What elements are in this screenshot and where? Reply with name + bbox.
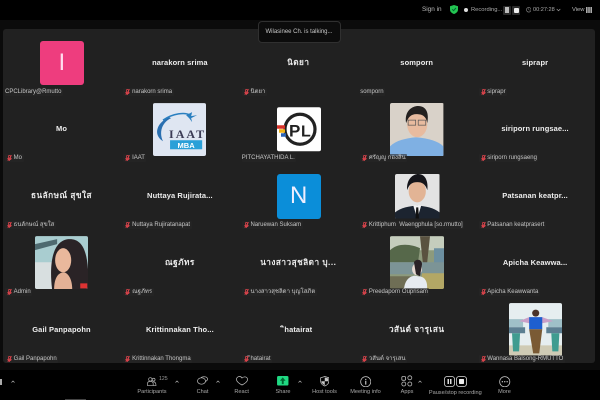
display name: narakorn srima: [152, 58, 208, 67]
participant tile: Krittiphum Waengphula: [362, 174, 463, 228]
icon: pause recording: [444, 376, 455, 386]
name label: [479, 288, 540, 296]
host tools label: Host tools: [312, 389, 337, 395]
display name: Gail Panpapohn: [32, 324, 91, 334]
avatar: blue initial: N: [290, 182, 307, 209]
name label: Nuttaya Rujiratanapat: [132, 222, 190, 228]
name label: ณฐภัทร: [132, 289, 152, 295]
toolbar button: chat: [195, 374, 222, 386]
name label: Apicha Keawwanta: [487, 289, 538, 295]
logo: IAAT MBA: IAAT: [169, 127, 204, 141]
name label: [123, 154, 146, 162]
display name: ณฐภัทร: [165, 258, 195, 267]
icon: timer chevron: [556, 8, 560, 12]
name label: [5, 354, 58, 362]
icon: react heart: [236, 376, 248, 386]
icon: stop recording: [456, 376, 467, 386]
icon: host tools shield: [320, 376, 329, 386]
display name: Krittinnakan Tho...: [146, 324, 214, 334]
name label: [479, 154, 538, 162]
logo: IAAT MBA: [153, 103, 206, 156]
name label: ศรัญญู กองสิน: [369, 155, 406, 161]
react label: React: [234, 389, 249, 395]
name label: [360, 154, 407, 162]
display name: siriporn rungsae...: [501, 124, 569, 133]
share label: Share: [276, 389, 290, 395]
name label: [5, 154, 24, 162]
participant tile: Naruewan Suksam: [244, 174, 321, 228]
name label: ธนลักษณ์ สุขใส: [14, 222, 54, 228]
photo: person in blue shirt among displays: [509, 303, 562, 356]
participant tile: Apicha Keawwanta: [481, 258, 567, 295]
name label: Krittinnakan Thongma: [132, 356, 191, 362]
name label: [123, 88, 174, 96]
display name: นิตยา: [287, 58, 309, 67]
avatar: pink initial: [40, 41, 84, 85]
icon: apps chevron: [418, 380, 422, 383]
participants label: Participants: [137, 389, 167, 395]
toolbar button: participants: [147, 376, 179, 386]
display name: siprapr: [522, 58, 548, 67]
name label: [360, 221, 464, 229]
name label: [479, 354, 565, 362]
icon: pause button: [503, 6, 511, 14]
speaker notification: [258, 21, 340, 43]
recording label: Recording...: [471, 7, 502, 13]
speaker notification: Wilasinee Ch. is talking...: [265, 29, 333, 35]
icon: share chevron: [298, 380, 302, 383]
icon: participants chevron: [174, 380, 178, 383]
participant tile: Gail Panpapohn: [7, 324, 91, 362]
name label: Gail Panpapohn: [14, 356, 57, 362]
sign in link: Sign in: [422, 6, 442, 13]
photo: man in suit: [395, 174, 440, 218]
logo: IAAT MBA: MBA: [178, 140, 196, 149]
participant tile: PITCHAYATHIDA L.: [242, 107, 321, 161]
name label: Admin: [14, 289, 31, 295]
icon: share arrow: [277, 376, 288, 386]
participant tile: somporn: [360, 58, 433, 95]
photo: man in blue shirt: [390, 103, 444, 156]
display name: วสันต์ จารุเสน: [389, 324, 444, 334]
name label: siprapr: [487, 89, 506, 95]
display name: Nuttaya Rujirata...: [147, 191, 213, 200]
top bar: [0, 0, 600, 20]
participant tile: Chatairat: [244, 324, 312, 362]
avatar: pink initial: I: [59, 49, 65, 76]
logo: PL: L: [301, 124, 311, 141]
meeting timer: 00:27:28: [533, 7, 555, 13]
meeting info label: Meeting info: [350, 389, 381, 395]
name label: นิตยา: [250, 89, 265, 95]
participant tile: photo man in blue shirt: [362, 103, 444, 161]
icon: audio chevron: [11, 380, 15, 383]
bottom toolbar: [0, 370, 600, 400]
name label: Mo: [14, 155, 22, 161]
avatar: blue initial: [277, 174, 321, 219]
icon: stop button: [512, 6, 520, 14]
name label: somporn: [360, 89, 384, 95]
name label: [242, 288, 317, 296]
participant tile: Preedaporn Ouprisam: [362, 236, 444, 295]
name label: [479, 221, 546, 229]
participant tile: ธนลักษณ์ สุขใส: [7, 190, 92, 228]
participant tile: ณฐภัทร: [125, 258, 195, 295]
name label: [479, 88, 507, 96]
name label: CPCLibrary@Rmutto: [5, 89, 61, 95]
icon: apps: [401, 375, 413, 387]
name label: Naruewan Suksam: [250, 222, 301, 228]
name label: Patsanan keatprasert: [487, 222, 544, 228]
name label: [242, 354, 272, 362]
display name: Mo: [56, 124, 67, 133]
audio button, cropped at left edge: [0, 379, 15, 385]
icon: partial microphone: [0, 378, 2, 384]
display name: ธนลักษณ์ สุขใส: [31, 191, 92, 200]
view button: View: [572, 7, 584, 13]
participant tile: วสันต์ จารุเสน: [362, 324, 444, 362]
name label: IAAT: [132, 155, 145, 161]
toolbar button: pause/stop recording: [444, 376, 467, 386]
icon: view grid: [586, 7, 592, 13]
apps label: Apps: [401, 389, 413, 395]
participant tile: narakorn srima: [125, 58, 208, 95]
display name: Patsanan keatpr...: [502, 191, 568, 200]
participant tile: Mo: [7, 124, 67, 161]
participant tile: CPCLibrary: [5, 41, 84, 95]
more label: More: [498, 389, 511, 395]
icon: security shield: [450, 5, 458, 14]
name label: [123, 221, 192, 229]
name label: [5, 288, 32, 296]
icon: chat chevron: [216, 380, 220, 383]
photo: woman with long dark hair: [35, 236, 88, 289]
name label: Preedaporn Ouprisam: [369, 289, 428, 295]
participant tile: Wannasa Balsong-RMUTTO: [481, 303, 563, 362]
name label: [242, 221, 303, 229]
participant tile: IAAT: [125, 103, 206, 161]
icon: participants: [147, 376, 156, 386]
name label: [5, 221, 56, 229]
participant tile: Patsanan keatprasert: [481, 191, 568, 228]
name label: [360, 354, 407, 362]
recording status: [464, 6, 520, 15]
pause/stop recording label: Pause/stop recording: [429, 390, 482, 396]
participant count: 125: [159, 376, 168, 382]
icon: recording dot: [464, 8, 468, 12]
display name: ิhatairat: [284, 324, 312, 334]
logo: PL: P: [289, 122, 300, 141]
name label: siriporn rungsaeng: [487, 155, 537, 161]
display name: นางสาวสุชลิดา บุ...: [260, 258, 336, 267]
display name: Apicha Keawwa...: [503, 258, 567, 267]
photo: person outdoors under trees: [390, 236, 444, 289]
name label: [123, 354, 192, 362]
display name: somporn: [400, 58, 433, 67]
name label: [242, 88, 267, 96]
name label: [123, 288, 154, 296]
name label: PITCHAYATHIDA L.: [242, 155, 295, 161]
participant tile: siriporn rungsaeng: [481, 124, 569, 161]
name label: ิhatairat: [250, 356, 270, 362]
participant tile: Nuttaya Rujiratanapat: [125, 191, 213, 228]
icon: meeting info: [360, 376, 371, 387]
name label: นางสาวสุชลิดา บุญโสภิต: [250, 289, 315, 295]
participant tile: Admin: [7, 236, 88, 295]
name label: Wannasa Balsong-RMUTTO: [487, 356, 563, 362]
icon: chat bubbles: [197, 376, 208, 386]
participant tile: Krittinnakan Thongma: [125, 324, 214, 362]
logo: PL: [277, 107, 321, 152]
name label: [360, 288, 429, 296]
toolbar button: share: [277, 376, 307, 386]
participant tile: นิตยา: [244, 58, 309, 95]
icon: clock: [526, 7, 531, 12]
toolbar button: apps: [401, 375, 425, 388]
participant tile: นางสาวสุชลิดา บุ...: [244, 258, 336, 295]
chat label: Chat: [197, 389, 208, 395]
name label: narakorn srima: [132, 89, 172, 95]
participant tile: siprapr: [481, 58, 548, 95]
name label: วสันต์ จารุเสน: [369, 356, 406, 362]
name label: Krittiphum Waengphula [so.rmutto]: [369, 222, 463, 228]
icon: more: [499, 376, 510, 387]
